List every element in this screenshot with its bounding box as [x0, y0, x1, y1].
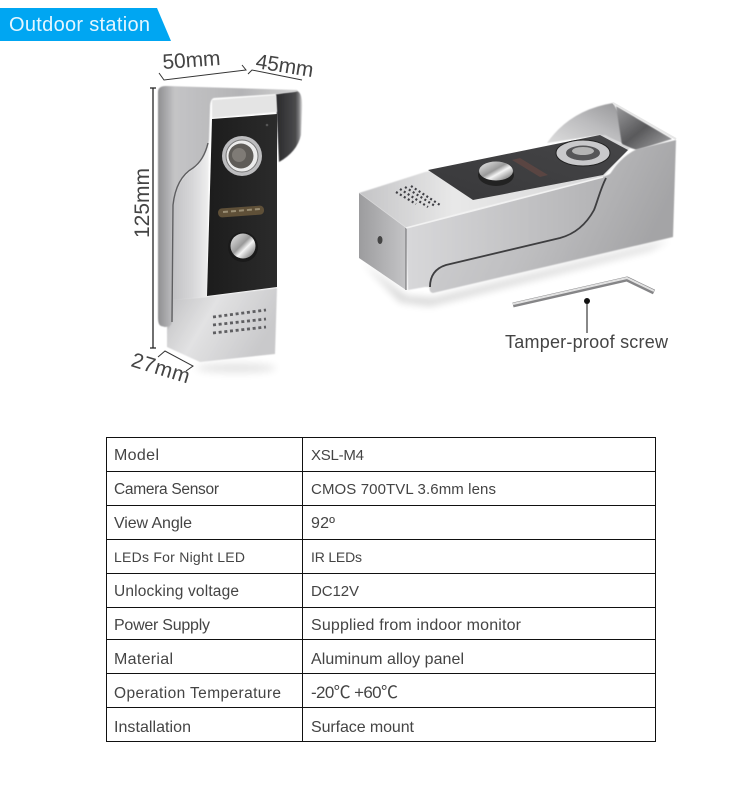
top edge highlight: [406, 177, 603, 228]
row: View Angle: View Angle: [114, 515, 192, 532]
tamper-proof screw key: [513, 278, 654, 305]
dimension: 125mm: [131, 88, 156, 348]
edge line: [405, 228, 407, 290]
screw caption: Tamper-proof screw: [505, 332, 669, 352]
infrared LED strip: [218, 205, 264, 218]
row: Unlocking voltage: [114, 583, 359, 600]
dimension: 45mm: 45mm: [254, 50, 315, 82]
hood rim highlight: [613, 103, 676, 139]
row: Power Supply: Supplied from indoor monitor: [311, 617, 522, 634]
dimension: 27mm: 27mm: [129, 349, 193, 388]
LED strip: [512, 158, 548, 177]
row: Camera Sensor: [114, 481, 496, 498]
dimension: 125mm: 125mm: [131, 168, 154, 238]
speaker grille: [213, 310, 266, 333]
row: Model: Model: [114, 447, 159, 464]
row: Power Supply: [114, 617, 522, 634]
heading banner: Outdoor station: [0, 8, 171, 41]
speaker holes: [396, 186, 440, 207]
mic hole: [266, 124, 268, 126]
row: LEDs For Night LED: [114, 549, 362, 565]
heading banner: Outdoor station: Outdoor station: [9, 14, 150, 36]
row: Model: XSL-M4: [311, 447, 364, 464]
call button: [228, 232, 258, 262]
row: Operation Temperature: -20℃ +60℃: [311, 683, 398, 702]
top silver face: [359, 135, 630, 228]
dimension: 50mm: 50mm: [162, 47, 221, 74]
specification table: [106, 438, 656, 742]
hood inner wall: [616, 106, 672, 150]
body lower plate: [167, 288, 277, 362]
row: Camera Sensor: Camera Sensor: [114, 481, 219, 498]
camera lens ring: [222, 136, 262, 176]
row: Camera Sensor: CMOS 700TVL 3.6mm lens: [311, 481, 496, 498]
table grid: [106, 438, 656, 742]
row: Unlocking voltage: DC12V: [311, 583, 359, 600]
row: Unlocking voltage: Unlocking voltage: [114, 583, 239, 600]
side body: [406, 170, 620, 290]
shadow under front view: [196, 363, 276, 373]
row: LEDs For Night LED: IR LEDs: [311, 549, 362, 565]
row: Material: [114, 651, 464, 668]
row: Material: Aluminum alloy panel: [311, 651, 464, 668]
dark top panel: [428, 135, 628, 200]
row: Installation: Installation: [114, 719, 191, 736]
product photo: outdoor station angled view: [359, 103, 676, 306]
side flange with hood: [158, 86, 297, 327]
camera ring: [556, 140, 610, 166]
flange groove line: [172, 143, 208, 322]
row: Material: Material: [114, 651, 173, 668]
row: Model: [114, 447, 364, 464]
end face with screw hole: [359, 193, 406, 290]
strip between flange and panel: [167, 140, 209, 330]
hood top band: [212, 95, 277, 118]
dimension: 50mm: [159, 47, 246, 80]
push button: [478, 162, 514, 186]
hood interior: [276, 91, 302, 162]
row: View Angle: 92º: [311, 515, 335, 532]
shadow under angled view: [362, 240, 670, 306]
row: Power Supply: Power Supply: [114, 617, 210, 634]
product photo: outdoor station front view: [158, 86, 302, 373]
row: Operation Temperature: Operation Temperature: [114, 685, 281, 702]
black front panel: [207, 114, 277, 296]
row: View Angle: [114, 515, 335, 532]
row: Installation: [114, 719, 415, 736]
row: Installation: Surface mount: [311, 719, 415, 736]
screw pointer: [584, 298, 590, 333]
hood back arc: [547, 103, 640, 150]
row: LEDs For Night LED: LEDs For Night LED: [114, 549, 245, 565]
side sweep panel: [429, 140, 676, 293]
sweep groove line: [430, 178, 606, 287]
row: Operation Temperature: [114, 683, 398, 702]
